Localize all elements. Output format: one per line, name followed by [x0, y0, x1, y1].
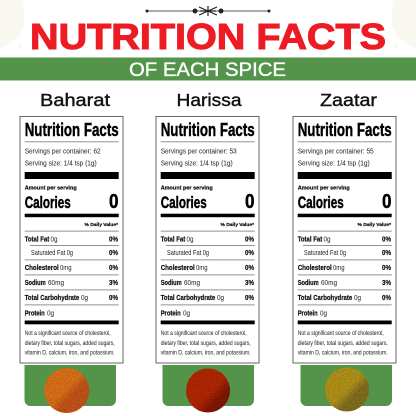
panel: Harissa nutrition label: 0%	[245, 248, 254, 257]
panel: Zaatar nutrition label: 0mg	[333, 263, 344, 272]
panel: Harissa nutrition label: 0g	[217, 293, 224, 302]
panel: Zaatar nutrition label: Calories	[298, 194, 344, 212]
panel: Harissa nutrition label: Amount per serving	[161, 186, 213, 192]
green tab: Harissa	[162, 365, 254, 406]
panel: Baharat nutrition label: Total Carbohydrate	[25, 293, 79, 302]
panel: Harissa nutrition label: Serving size: 1/4 tsp (1g)	[161, 158, 233, 168]
panel: Baharat nutrition label: 0%	[109, 248, 118, 257]
green tab: Baharat	[24, 365, 116, 406]
panel: Zaatar nutrition label: 60mg	[321, 278, 337, 287]
subtitle band: OF EACH SPICE	[129, 59, 286, 81]
panel: Zaatar nutrition label: 0	[382, 191, 392, 213]
panel: Harissa nutrition label: 0mg	[196, 263, 208, 272]
panel: Baharat nutrition label: 0g	[81, 293, 88, 302]
panel: Baharat nutrition label: 0g	[50, 234, 58, 244]
panel: Zaatar nutrition label: Protein	[298, 308, 318, 318]
panel: Harissa nutrition label: Saturated Fat 0g	[167, 248, 209, 257]
spice: Harissa powder	[186, 368, 230, 412]
panel: Harissa nutrition label: 0%	[245, 234, 254, 244]
panel: Zaatar nutrition label: Serving size: 1/4 tsp (1g)	[298, 158, 370, 168]
top ornament divider	[146, 6, 270, 16]
panel: Harissa nutrition label: 0g	[186, 234, 194, 244]
panel: Harissa nutrition label: 0g	[183, 308, 190, 318]
panel: Baharat nutrition label: Total Fat	[25, 234, 50, 244]
panel: Zaatar nutrition label	[293, 116, 396, 363]
panel: Harissa nutrition label: Total Carbohydrate	[161, 293, 215, 302]
panel: Baharat nutrition label	[20, 116, 123, 363]
panel: Baharat nutrition label: Saturated Fat 0g	[31, 248, 73, 257]
panel: Baharat nutrition label: Servings per container: 62	[25, 146, 101, 156]
decorative corner ornament left	[0, 0, 25, 48]
spice: Baharat powder	[44, 368, 89, 413]
panel: Baharat nutrition label: dietary fiber, total sugars, added sugars,	[25, 340, 115, 347]
panel: Harissa nutrition label: Total Fat	[161, 234, 186, 244]
panel: Zaatar nutrition label: 3%	[382, 278, 391, 287]
panel: Baharat nutrition label: Not a significant source of cholesterol,	[25, 330, 111, 337]
heading: Zaatar: Zaatar	[320, 90, 377, 110]
panel: Zaatar nutrition label: Servings per container: 55	[298, 146, 374, 156]
panel: Baharat nutrition label: Sodium	[25, 278, 46, 287]
panel: Zaatar nutrition label: 0%	[382, 263, 391, 272]
panel: Zaatar nutrition label: 0%	[382, 293, 391, 302]
panel: Baharat nutrition label: 0%	[109, 234, 118, 244]
panel: Baharat nutrition label: Nutrition Facts	[25, 119, 119, 140]
heading: Baharat: Baharat	[40, 90, 110, 110]
panel: Zaatar nutrition label: dietary fiber, total sugars, added sugars,	[298, 340, 388, 347]
panel: Baharat nutrition label: 0mg	[60, 263, 72, 272]
panel: Zaatar nutrition label: Not a significant source of cholesterol,	[298, 330, 384, 337]
panel: Harissa nutrition label: 3%	[245, 278, 254, 287]
panel: Baharat nutrition label: Protein	[25, 308, 45, 318]
panel: Baharat nutrition label: vitamin D, calcium, iron, and potassium.	[25, 350, 115, 356]
heading: Harissa: Harissa	[176, 90, 242, 110]
panel: Zaatar nutrition label: 0g	[324, 234, 330, 244]
panel: Zaatar nutrition label: 0%	[382, 248, 391, 257]
panel: Baharat nutrition label: 0%	[109, 293, 118, 302]
panel: Baharat nutrition label: 3%	[109, 278, 118, 287]
panel: Zaatar nutrition label: Total Carbohydrate	[298, 293, 352, 302]
green tab: Zaatar	[300, 365, 392, 406]
panel: Baharat nutrition label: % Daily Value*	[84, 222, 118, 228]
panel: Harissa nutrition label: Not a significant source of cholesterol,	[161, 330, 247, 337]
decorative corner ornament right	[391, 0, 416, 48]
panel: Harissa nutrition label: Servings per container: 53	[161, 146, 237, 156]
panel: Harissa nutrition label: dietary fiber, total sugars, added sugars,	[161, 340, 251, 347]
panel: Baharat nutrition label: 0	[109, 191, 118, 213]
panel: Zaatar nutrition label: vitamin D, calcium, iron, and potassium.	[298, 350, 388, 356]
panel: Harissa nutrition label: 0	[245, 191, 254, 213]
panel: Harissa nutrition label: Cholesterol	[161, 263, 195, 272]
panel: Zaatar nutrition label: % Daily Value*	[358, 222, 391, 228]
panel: Baharat nutrition label: Amount per serving	[25, 186, 77, 192]
panel: Baharat nutrition label: Serving size: 1/4 tsp (1g)	[25, 158, 97, 168]
panel: Zaatar nutrition label: 0%	[382, 234, 391, 244]
panel: Harissa nutrition label: % Daily Value*	[220, 222, 254, 228]
panel: Harissa nutrition label: Sodium	[161, 278, 182, 287]
panel: Zaatar nutrition label: 0g	[320, 308, 327, 318]
panel: Zaatar nutrition label: Cholesterol	[298, 263, 332, 272]
panel: Baharat nutrition label: 0%	[109, 263, 118, 272]
subtitle band	[0, 58, 416, 81]
panel: Harissa nutrition label: 0%	[245, 293, 254, 302]
panel: Baharat nutrition label: Calories	[25, 194, 71, 212]
panel: Harissa nutrition label: Nutrition Facts	[161, 119, 255, 140]
title: NUTRITION FACTS	[30, 16, 386, 57]
panel: Zaatar nutrition label: Sodium	[298, 278, 319, 287]
panel: Harissa nutrition label: 0%	[245, 263, 254, 272]
panel: Zaatar nutrition label: Saturated Fat 0g	[304, 248, 346, 257]
panel: Harissa nutrition label	[156, 116, 259, 363]
panel: Zaatar nutrition label: 0g	[354, 293, 361, 302]
panel: Zaatar nutrition label: Amount per serving	[298, 186, 350, 192]
panel: Harissa nutrition label: vitamin D, calcium, iron, and potassium.	[161, 350, 251, 356]
panel: Baharat nutrition label: Cholesterol	[25, 263, 59, 272]
panel: Baharat nutrition label: 0g	[47, 308, 54, 318]
spice: Zaatar powder	[325, 368, 369, 412]
panel: Zaatar nutrition label: Total Fat	[298, 234, 323, 244]
panel: Harissa nutrition label: Calories	[161, 194, 207, 212]
panel: Harissa nutrition label: Protein	[161, 308, 181, 318]
panel: Harissa nutrition label: 60mg	[184, 278, 200, 287]
panel: Baharat nutrition label: 60mg	[48, 278, 64, 287]
